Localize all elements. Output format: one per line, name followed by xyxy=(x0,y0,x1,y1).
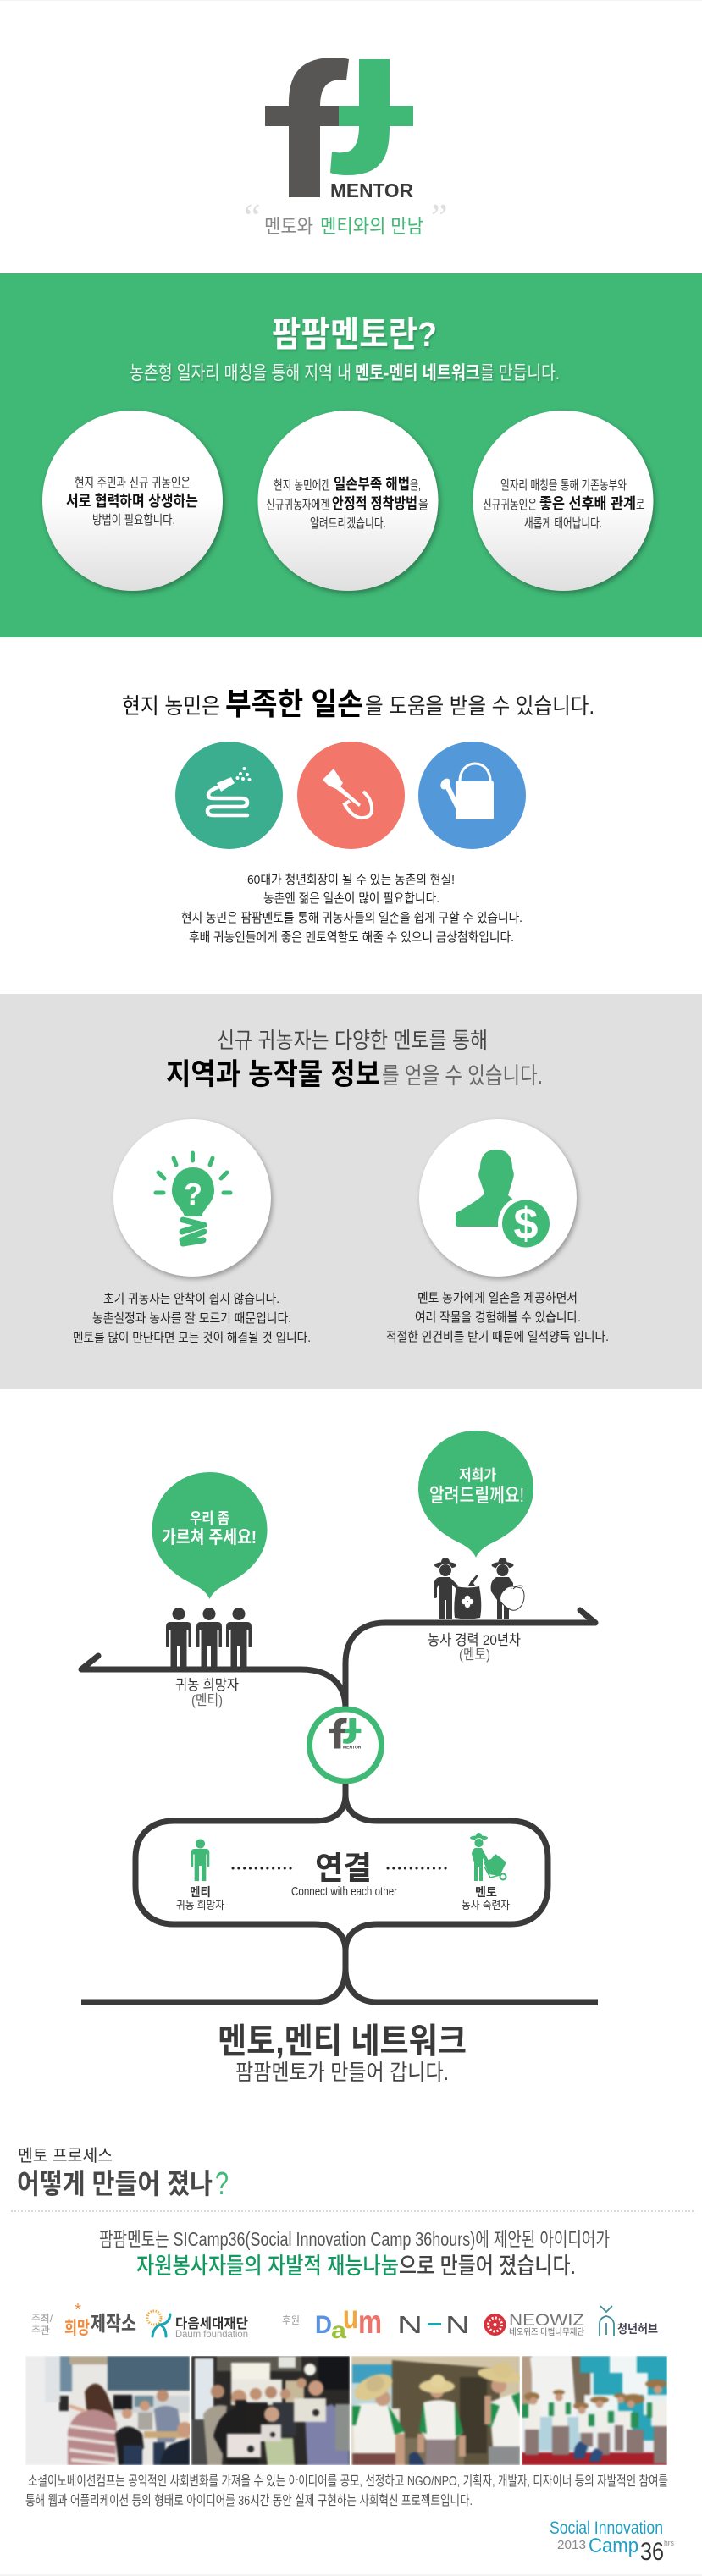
icon: green farmer with wheelbarrow xyxy=(470,1833,506,1881)
heading: network: 팜팜멘토가 만들어 갑니다. xyxy=(235,2060,449,2085)
intro text: 으로 만들어 졌습니다. xyxy=(399,2253,576,2279)
heading: 을 도움을 받을 수 있습니다. xyxy=(365,693,594,719)
logo: NEOWIZ: NEOWIZ xyxy=(509,2311,584,2330)
subheading: 농촌형 일자리 매칭을 통해 지역 내 xyxy=(130,362,351,383)
body text: 후배 귀농인들에게 좋은 멘토역할도 해줄 수 있으니 금상첨화입니다. xyxy=(189,930,514,945)
speech bubble: mentor xyxy=(418,1431,533,1558)
label: mentor small xyxy=(462,1885,510,1911)
heading: 부족한 일손 xyxy=(225,687,363,721)
icon: hose xyxy=(175,742,283,849)
panel: 팜팜멘토란 xyxy=(0,273,702,637)
left text: 농촌실정과 농사를 잘 모르기 때문입니다. xyxy=(92,1311,291,1326)
circle: labour solution xyxy=(257,411,439,591)
tagline with quotes: “ xyxy=(244,196,261,238)
badge: logo in ring: MENTOR xyxy=(343,1745,362,1750)
icon: question bulb xyxy=(113,1119,271,1277)
logo: NHN: N xyxy=(445,2312,470,2339)
label: host: 주관 xyxy=(31,2325,50,2336)
tagline with quotes: ” xyxy=(431,196,448,238)
label: mentee xyxy=(175,1677,239,1708)
label: mentee small xyxy=(176,1885,224,1911)
icon: shovel xyxy=(297,742,405,849)
speech bubble: mentee xyxy=(152,1472,268,1599)
circle: good relationship: 새롭게 태어납니다. xyxy=(524,516,602,531)
logo: NHN xyxy=(397,2312,470,2339)
label: host: 주최/ xyxy=(31,2313,53,2325)
subheading: 를 만듭니다. xyxy=(480,362,560,383)
logo: Social Innovation Camp 36 xyxy=(550,2518,674,2566)
logo: Daum: D xyxy=(315,2311,332,2339)
label: mentee: (멘티) xyxy=(191,1692,223,1708)
logo: Social Innovation Camp 36: Social Innovation xyxy=(550,2518,663,2538)
heading: 현지 농민은 xyxy=(122,693,220,719)
label: mentee: 귀농 희망자 xyxy=(175,1677,239,1693)
logo: 다음세대재단: 다음세대재단 xyxy=(175,2316,248,2331)
heading: 를 얻을 수 있습니다. xyxy=(382,1063,543,1089)
logo: 희망제작소: * xyxy=(75,2301,81,2320)
circle: good relationship: 신규귀농인은 xyxy=(483,498,537,512)
circle: good relationship: 일자리 매칭을 통해 기존농부와 xyxy=(500,478,627,493)
logo: fj mentor: MENTOR xyxy=(330,179,413,201)
connection: dots and title: Connect with each other xyxy=(291,1884,397,1899)
logo: 희망제작소: 제작소 xyxy=(91,2313,136,2336)
intro text: 자원봉사자들의 자발적 재능나눔 xyxy=(136,2253,399,2279)
photo: farmers with straw hats xyxy=(351,2356,522,2465)
speech bubble: mentee: 가르쳐 주세요! xyxy=(162,1528,257,1547)
logo: 청년허브: 청년허브 xyxy=(617,2322,658,2336)
photo: discussion at whiteboard xyxy=(25,2356,192,2465)
icon: green mentee xyxy=(191,1839,209,1881)
logo: 희망제작소: 희망 xyxy=(64,2319,90,2338)
label: mentor xyxy=(428,1632,521,1663)
circle: labour solution: 현지 농민에겐 xyxy=(274,478,330,493)
circle: labour solution: 을, xyxy=(410,478,421,493)
logo: Social Innovation Camp 36: Camp xyxy=(589,2535,638,2557)
circle: cooperation xyxy=(42,411,223,591)
logo: Social Innovation Camp 36: 2013 xyxy=(557,2539,586,2552)
heading: 신규 귀농자는 다양한 멘토를 통해 xyxy=(217,1028,488,1053)
logo: fj mentor xyxy=(265,58,413,201)
logo: NEOWIZ xyxy=(484,2311,584,2337)
logo: Daum xyxy=(315,2299,382,2343)
body text: 농촌엔 젊은 일손이 많이 필요합니다. xyxy=(263,891,439,906)
logo: NHN: N xyxy=(397,2312,423,2339)
circle: good relationship: 로 xyxy=(636,498,644,512)
label: mentee small: 귀농 희망자 xyxy=(176,1899,224,1911)
circle: cooperation: 방법이 필요합니다. xyxy=(92,513,175,527)
logo: Social Innovation Camp 36: 36 xyxy=(640,2538,664,2566)
right text: 적절한 인건비를 받기 때문에 일석양득 입니다. xyxy=(386,1330,609,1344)
left text xyxy=(73,1292,311,1345)
circle: good relationship: 좋은 선후배 관계 xyxy=(539,495,636,512)
heading: network xyxy=(218,2022,467,2085)
label: mentor: (멘토) xyxy=(459,1647,490,1663)
description text xyxy=(25,2474,668,2508)
logo: 청년허브 xyxy=(600,2306,658,2336)
logo: Daum: m xyxy=(358,2304,382,2341)
body text xyxy=(181,873,522,945)
icon: watering can xyxy=(418,742,526,849)
tagline with quotes: 멘티와의 만남 xyxy=(320,215,423,237)
connection: dots and title xyxy=(233,1851,450,1899)
logo: Daum: a xyxy=(331,2317,346,2343)
left text: 초기 귀농자는 안착이 쉽지 않습니다. xyxy=(103,1292,279,1306)
photo: group with boxes xyxy=(191,2356,350,2465)
circle: good relationship xyxy=(473,411,654,591)
label: mentee small: 멘티 xyxy=(190,1885,211,1899)
logo: 다음세대재단: Daum foundation xyxy=(175,2328,248,2340)
right text: 여러 작물을 경험해볼 수 있습니다. xyxy=(415,1310,581,1325)
speech bubble: mentee: 우리 좀 xyxy=(190,1510,229,1527)
heading: process: 멘토 프로세스 xyxy=(18,2146,113,2165)
body text: 현지 농민은 팜팜멘토를 통해 귀농자들의 일손을 쉽게 구할 수 있습니다. xyxy=(181,911,522,925)
tagline with quotes: 멘토와 xyxy=(264,215,313,237)
panel: new returning farmers xyxy=(0,994,702,1389)
heading: process xyxy=(17,2146,229,2202)
heading: process: 어떻게 만들어 졌나 xyxy=(17,2168,213,2199)
diagram: network roads xyxy=(81,1610,598,2002)
speech bubble: mentor: 저희가 xyxy=(459,1467,496,1484)
left text: 멘토를 많이 만난다면 모든 것이 해결될 것 입니다. xyxy=(73,1331,311,1345)
label: mentor small: 농사 숙련자 xyxy=(462,1899,510,1911)
heading: 팜팜멘토란? xyxy=(272,315,437,354)
heading: process: ? xyxy=(215,2166,229,2202)
right text: 멘토 농가에게 일손을 제공하면서 xyxy=(417,1291,578,1305)
logo: Daum: u xyxy=(343,2299,358,2336)
circle: labour solution: 안정적 정착방법 xyxy=(332,495,417,512)
icon: person with dollar coin xyxy=(419,1119,577,1277)
circle: labour solution: 을 xyxy=(418,498,428,512)
photo: team on red carpet xyxy=(522,2356,667,2465)
label: mentor small: 멘토 xyxy=(475,1885,497,1899)
description text: 통해 웹과 어플리케이션 등의 형태로 아이디어를 36시간 동안 실제 구현하는 사회혁신 프로젝트입니다. xyxy=(25,2493,473,2508)
subheading: 멘토-멘티 네트워크 xyxy=(355,362,480,383)
circle: cooperation: 현지 주민과 신규 귀농인은 xyxy=(75,476,191,490)
tagline with quotes xyxy=(244,196,448,238)
heading xyxy=(166,1028,543,1091)
heading: network: 멘토,멘티 네트워크 xyxy=(218,2022,467,2060)
heading xyxy=(122,687,594,721)
right text xyxy=(386,1291,609,1344)
logo: NEOWIZ: 네오위즈 마법나무재단 xyxy=(509,2326,584,2337)
panel: local farmers xyxy=(122,687,594,945)
label: host xyxy=(31,2313,53,2336)
icon: two farmers with sack and apple xyxy=(434,1558,524,1619)
speech bubble: mentor: 알려드릴께요! xyxy=(429,1484,524,1506)
icon: person with dollar coin: $ xyxy=(514,1200,539,1249)
label: mentor: 농사 경력 20년차 xyxy=(428,1632,521,1648)
heading: 지역과 농작물 정보 xyxy=(166,1058,380,1091)
logo: Social Innovation Camp 36: hrs xyxy=(664,2539,674,2547)
label: sponsor: 후원 xyxy=(282,2314,300,2326)
icon: question bulb: ? xyxy=(184,1177,202,1211)
circle: cooperation: 서로 협력하며 상생하는 xyxy=(66,493,198,510)
logo: 다음세대재단 xyxy=(147,2311,248,2340)
subheading xyxy=(130,362,560,383)
connection: dots and title: 연결 xyxy=(315,1851,372,1887)
icon: three mentees xyxy=(166,1608,252,1667)
badge: logo in ring xyxy=(310,1709,381,1781)
body text: 60대가 청년회장이 될 수 있는 농촌의 현실! xyxy=(247,873,455,887)
circle: labour solution: 신규귀농자에겐 xyxy=(266,498,329,512)
circle: labour solution: 알려드리겠습니다. xyxy=(310,516,386,531)
intro text xyxy=(99,2228,610,2279)
logo: 희망제작소 xyxy=(64,2301,136,2338)
circle: labour solution: 일손부족 해법 xyxy=(334,476,410,493)
